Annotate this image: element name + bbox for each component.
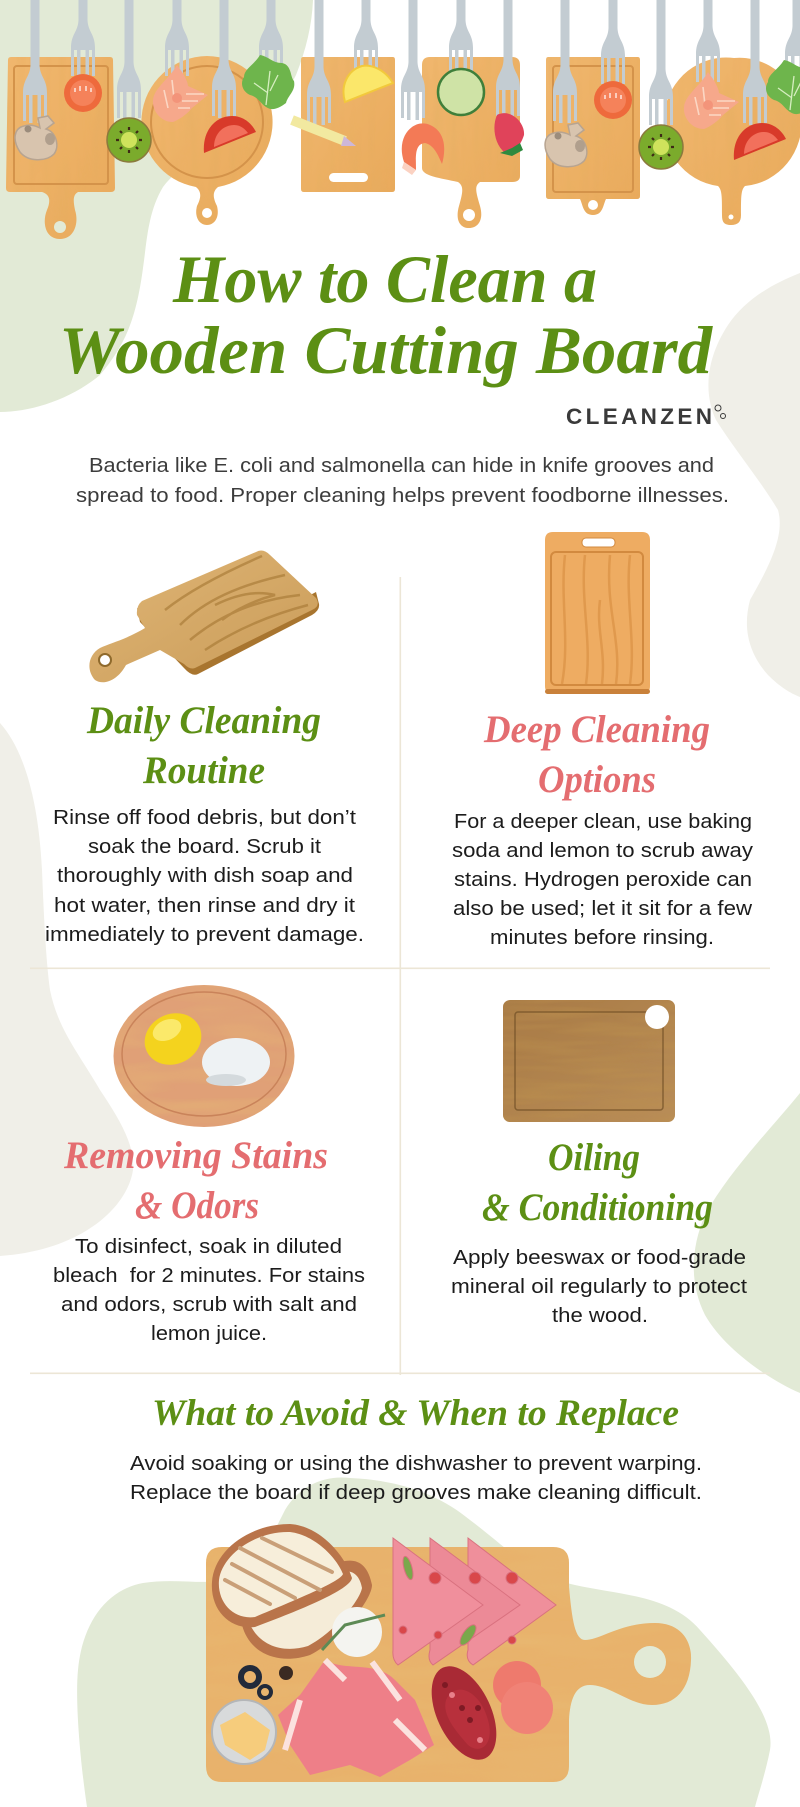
intro text: spread to food. Proper cleaning helps prevent foodborne illnesses. <box>76 484 729 507</box>
heading <box>63 1134 328 1227</box>
body text: the wood. <box>552 1305 648 1327</box>
sliced mortadella <box>393 1538 556 1665</box>
heading: Daily Cleaning <box>86 699 321 742</box>
body text: bleach for 2 minutes. For stains <box>53 1265 365 1287</box>
body text <box>130 1453 702 1504</box>
cream with rosemary <box>322 1607 385 1657</box>
heading <box>483 708 710 801</box>
icon: foods on forks <box>15 55 800 175</box>
body text: soak the board. Scrub it <box>88 836 321 858</box>
salami slices <box>418 1656 510 1770</box>
heading: What to Avoid & When to Replace <box>152 1393 679 1434</box>
body text: and odors, scrub with salt and <box>61 1294 357 1316</box>
body text: Avoid soaking or using the dishwasher to prevent warping. <box>130 1453 702 1475</box>
sliced prosciutto <box>278 1660 434 1777</box>
heading: Routine <box>142 749 265 792</box>
illustration: square dark wood board <box>503 1000 675 1122</box>
body text: Apply beeswax or food-grade <box>453 1247 746 1269</box>
heading <box>86 699 321 792</box>
title <box>59 241 713 388</box>
body text: thoroughly with dish soap and <box>57 865 353 887</box>
heading: & Conditioning <box>482 1186 713 1229</box>
illustration: round board with lemon and salt <box>114 985 294 1127</box>
illustration: upright wooden board <box>545 532 650 694</box>
panel: deep cleaning options <box>452 532 753 949</box>
body text: For a deeper clean, use baking <box>454 811 752 833</box>
panel: what to avoid and when to replace <box>130 1393 702 1782</box>
panel: removing stains and odors <box>53 985 365 1345</box>
body text: also be used; let it sit for a few <box>453 898 753 920</box>
panel: daily cleaning routine <box>45 551 364 946</box>
hanging boards and forks banner <box>6 0 800 239</box>
illustration: charcuterie board <box>206 1524 691 1782</box>
intro text: Bacteria like E. coli and salmonella can hide in knife grooves and <box>89 454 714 477</box>
title: Wooden Cutting Board <box>59 312 713 388</box>
title: How to Clean a <box>172 241 597 317</box>
body text: To disinfect, soak in diluted <box>75 1236 342 1258</box>
wooden board with handle <box>206 1547 691 1782</box>
panel: oiling and conditioning <box>451 1000 747 1327</box>
toasted bread slices <box>212 1524 372 1659</box>
body text <box>451 1247 747 1327</box>
body text: hot water, then rinse and dry it <box>54 895 355 917</box>
body text <box>452 811 753 949</box>
body text: soda and lemon to scrub away <box>452 840 753 862</box>
pepperoni slices <box>493 1661 553 1734</box>
heading <box>482 1136 713 1229</box>
body text <box>53 1236 365 1345</box>
body text: lemon juice. <box>151 1323 267 1345</box>
body text <box>45 807 364 946</box>
body text: stains. Hydrogen peroxide can <box>454 869 752 891</box>
hanging cutting boards <box>6 56 800 239</box>
hanging forks <box>23 0 800 127</box>
body text: immediately to prevent damage. <box>45 924 364 946</box>
heading: Deep Cleaning <box>483 708 710 751</box>
heading: Removing Stains <box>63 1134 328 1177</box>
body text: Rinse off food debris, but don’t <box>53 807 356 829</box>
heading: & Odors <box>135 1184 259 1227</box>
intro text <box>76 454 729 507</box>
brand logo: CLEANZEN <box>566 404 712 429</box>
illustration: angled wooden board <box>89 551 319 682</box>
body text: minutes before rinsing. <box>490 927 714 949</box>
bowl of butter <box>212 1700 276 1764</box>
heading: Options <box>538 758 656 801</box>
heading: Oiling <box>548 1136 640 1179</box>
olives and pepper <box>241 1666 293 1698</box>
body text: Replace the board if deep grooves make cleaning difficult. <box>130 1482 702 1504</box>
body text: mineral oil regularly to protect <box>451 1276 747 1298</box>
